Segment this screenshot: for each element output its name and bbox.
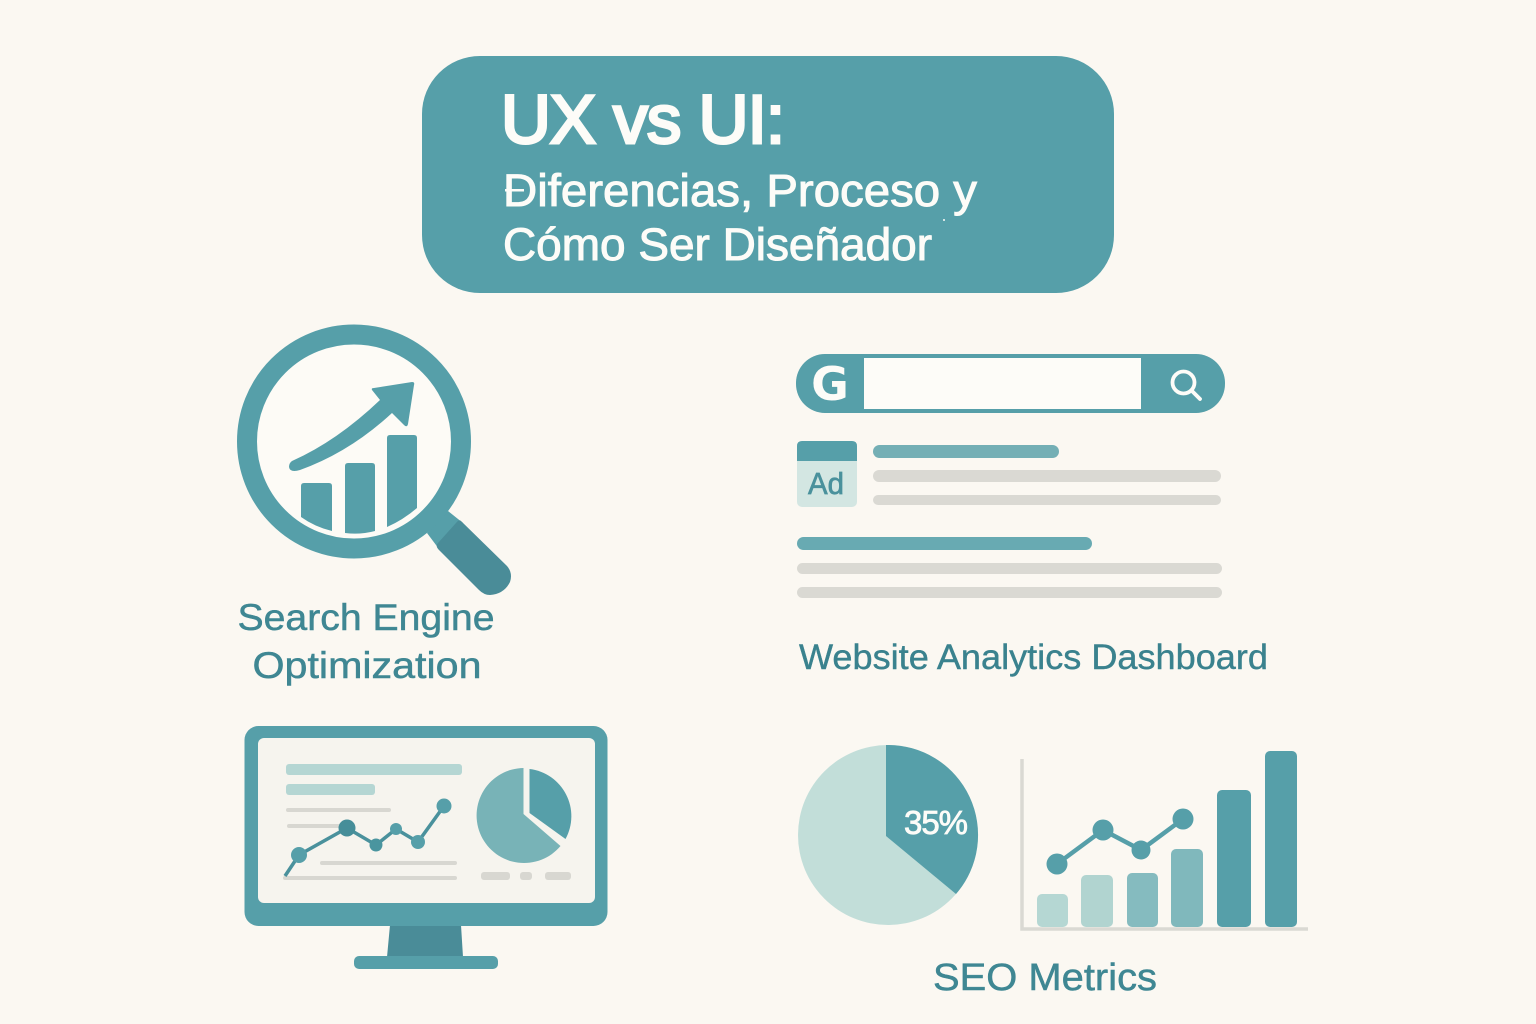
pie chart	[477, 768, 571, 863]
handle neck	[427, 511, 463, 549]
title banner	[422, 56, 1114, 293]
axes	[1022, 759, 1308, 929]
ad icon	[797, 441, 857, 507]
icon: G logo: G	[811, 357, 849, 411]
text bars	[286, 764, 462, 775]
line	[1046, 808, 1194, 874]
bars	[1037, 894, 1068, 927]
label: Search Engine Optimization	[238, 597, 494, 686]
lens ring	[247, 334, 461, 548]
subtitle line 2: Cómo Ser Diseñador	[503, 219, 932, 270]
bar: medium	[345, 463, 375, 534]
monitor stand	[387, 925, 463, 957]
handle grip	[437, 520, 511, 595]
monitor dashboard	[244, 726, 608, 969]
monitor frame	[244, 726, 608, 926]
icon: SEO magnifying glass	[247, 334, 511, 595]
search bar	[796, 354, 1225, 413]
search results list	[797, 445, 1222, 598]
label: Website Analytics Dashboard: Website Analytics Dashboard	[799, 638, 1268, 677]
title: UX vs UI:	[501, 81, 785, 158]
pie chart: 35%: 35%	[904, 804, 968, 841]
ad icon: Ad	[808, 466, 844, 501]
label: SEO Metrics: SEO Metrics	[933, 957, 1157, 999]
legend bars	[481, 872, 571, 880]
label: Search Engine Optimization: Optimization	[252, 645, 482, 686]
bar: tall	[387, 435, 417, 527]
pie chart: 35%	[798, 745, 978, 925]
label: Search Engine Optimization: Search Engine	[238, 597, 494, 638]
icon: search	[1172, 372, 1200, 399]
bar: small	[301, 483, 332, 531]
bar and line chart	[1022, 751, 1308, 929]
subtitle line 1: Diferencias, Proceso y	[503, 165, 978, 216]
line chart	[285, 798, 452, 876]
arrow: growth	[289, 382, 414, 471]
